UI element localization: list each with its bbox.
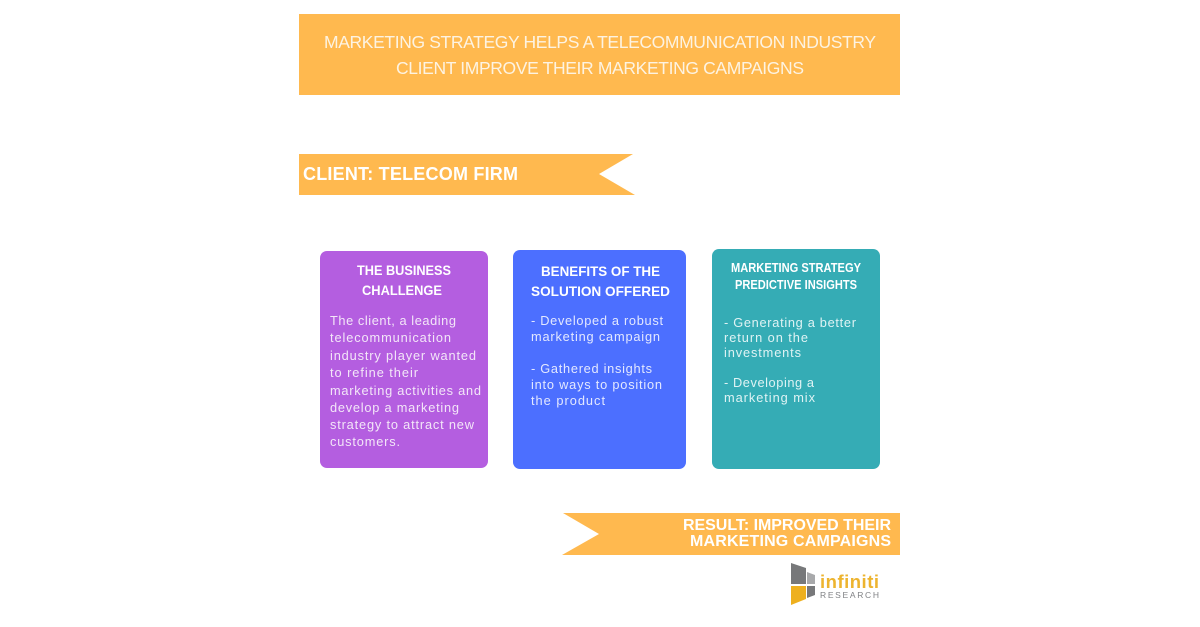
panel: benefits of the solution offered: - Developed a robust <box>531 313 663 328</box>
panel: the business challenge: telecommunication <box>330 330 451 345</box>
panel: marketing strategy predictive insights: marketing mix <box>724 390 816 405</box>
panel: benefits of the solution offered <box>513 250 686 469</box>
panel: the business challenge: marketing activities and <box>330 383 481 398</box>
panel: benefits of the solution offered: SOLUTION OFFERED <box>531 283 670 299</box>
logo: infiniti research: RESEARCH <box>820 590 879 600</box>
client ribbon: CLIENT: TELECOM FIRM <box>303 164 518 184</box>
icon: logo window mark <box>791 563 815 605</box>
panel: the business challenge: customers. <box>330 434 400 449</box>
panel: the business challenge: THE BUSINESS <box>357 262 451 278</box>
panel: marketing strategy predictive insights: investments <box>724 345 801 360</box>
panel: the business challenge: develop a marketing <box>330 400 459 415</box>
panel: the business challenge: The client, a leading <box>330 313 456 328</box>
panel: benefits of the solution offered: BENEFITS OF THE <box>541 263 660 279</box>
panel: benefits of the solution offered: - Gathered insights <box>531 361 652 376</box>
panel: marketing strategy predictive insights: PREDICTIVE INSIGHTS <box>735 277 857 292</box>
panel: marketing strategy predictive insights: return on the <box>724 330 808 345</box>
title banner <box>299 14 900 95</box>
panel: benefits of the solution offered: the product <box>531 393 605 408</box>
panel: benefits of the solution offered: marketing campaign <box>531 329 660 344</box>
panel: marketing strategy predictive insights: - Developing a <box>724 375 815 390</box>
result ribbon <box>562 513 900 555</box>
panel: the business challenge: industry player wanted <box>330 348 476 363</box>
panel: the business challenge <box>320 251 488 468</box>
title banner: CLIENT IMPROVE THEIR MARKETING CAMPAIGNS <box>396 58 804 78</box>
panel: the business challenge: CHALLENGE <box>362 282 442 298</box>
panel: marketing strategy predictive insights: MARKETING STRATEGY <box>731 260 861 275</box>
result ribbon: MARKETING CAMPAIGNS <box>690 533 891 550</box>
panel: the business challenge: to refine their <box>330 365 419 380</box>
panel: benefits of the solution offered: into ways to position <box>531 377 662 392</box>
panel: the business challenge: strategy to attract new <box>330 417 475 432</box>
logo: infiniti research <box>791 563 879 605</box>
panel: marketing strategy predictive insights <box>712 249 880 469</box>
title banner: MARKETING STRATEGY HELPS A TELECOMMUNICATION INDUSTRY <box>324 32 876 52</box>
panel: marketing strategy predictive insights: - Generating a better <box>724 315 857 330</box>
client ribbon <box>299 154 635 195</box>
logo: infiniti research: infiniti <box>820 571 879 592</box>
result ribbon: RESULT: IMPROVED THEIR <box>683 517 891 534</box>
